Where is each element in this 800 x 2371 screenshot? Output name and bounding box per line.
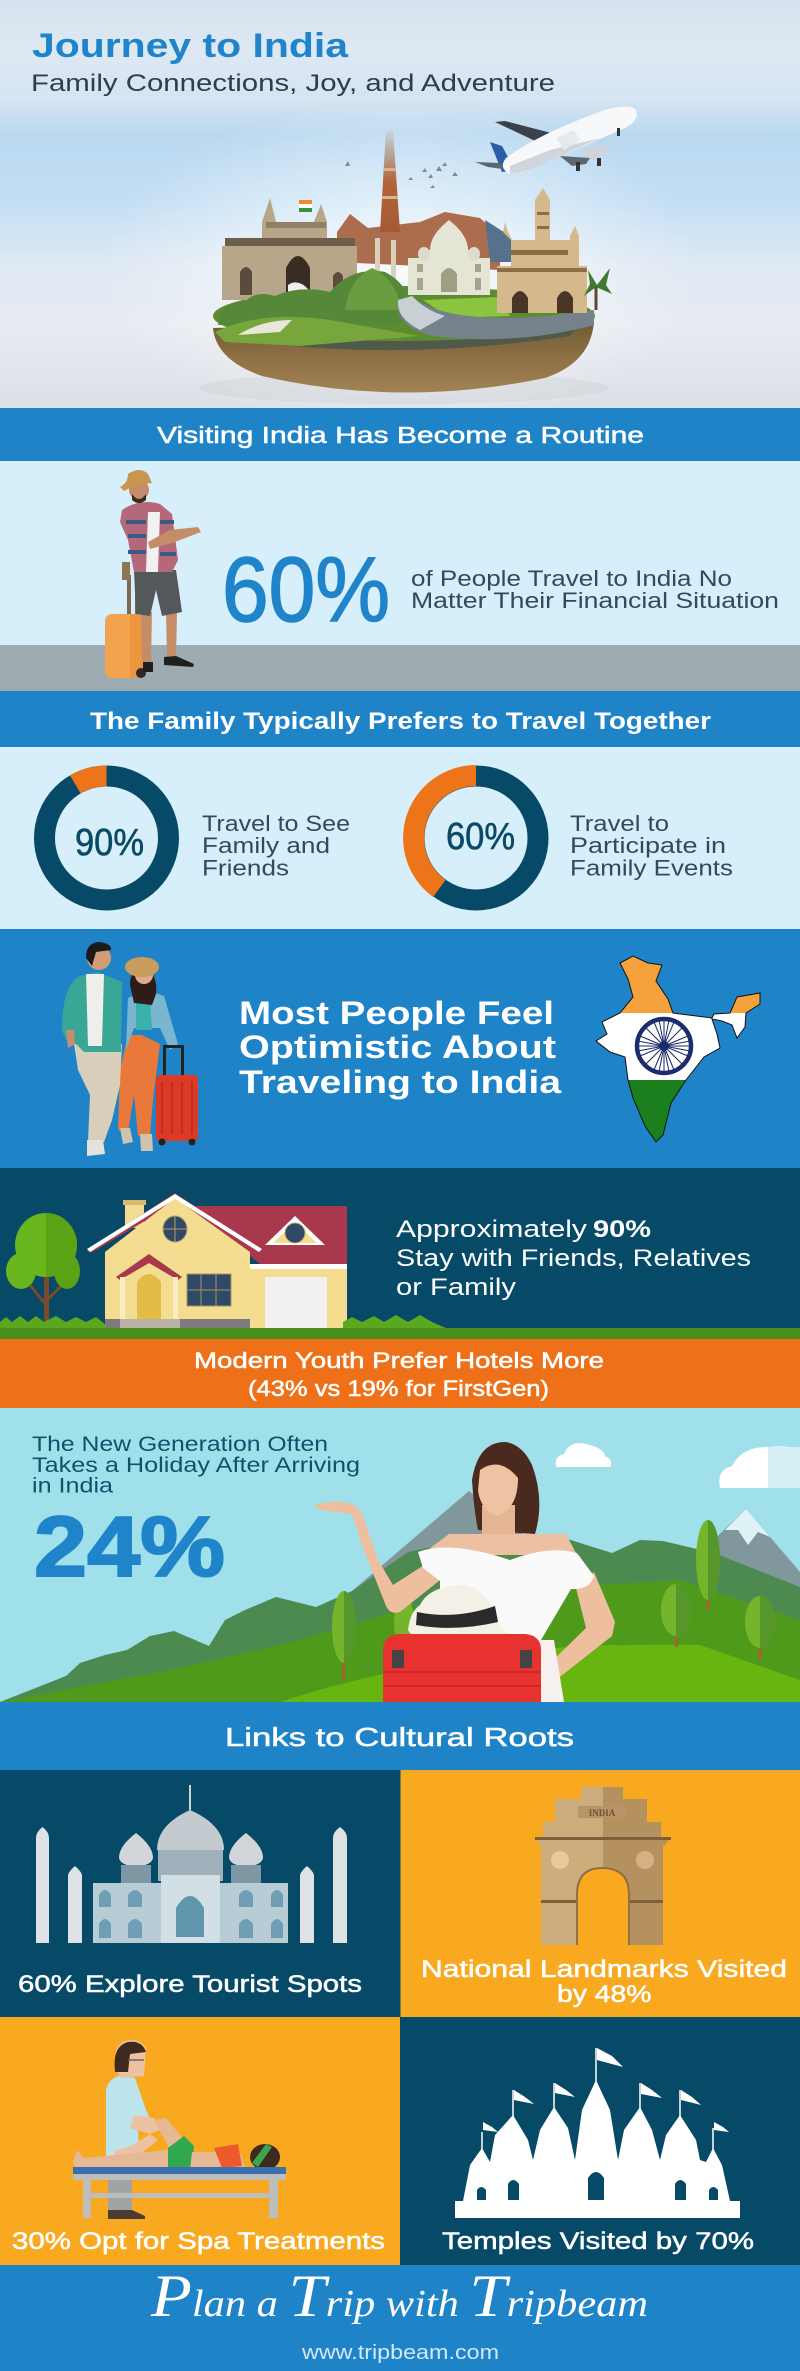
panel: national landmarks — [400, 1770, 800, 2017]
text: financial situation: Matter Their Financial Situation — [411, 588, 779, 613]
fort — [337, 212, 500, 270]
text: see family — [202, 811, 350, 880]
text: financial situation — [411, 566, 779, 613]
subtitle: Family Connections, Joy, and Adventure — [31, 70, 555, 97]
palm — [594, 285, 598, 310]
illustration: woman with suitcase — [314, 1442, 615, 1702]
gateway of india — [222, 198, 357, 300]
text: approximately 90%: or Family — [396, 1274, 516, 1301]
charminar — [497, 188, 587, 313]
heading: optimistic — [239, 995, 561, 1100]
panel: family donuts — [0, 747, 800, 929]
icon: traveler with suitcase — [105, 470, 201, 678]
banner: modern youth hotels: (43% vs 19% for FirstGen) — [248, 1376, 549, 1401]
panel: new generation holiday — [0, 1408, 800, 1702]
section heading: family together — [0, 691, 800, 747]
text: approximately 90%: 90% — [593, 1216, 651, 1243]
donut chart: 90%: 90% — [75, 822, 144, 864]
icon: india map flag — [595, 956, 760, 1143]
icon: couple with suitcase — [62, 942, 198, 1156]
icon: temple silhouette — [455, 2048, 740, 2218]
website: www.tripbeam.com — [301, 2342, 499, 2364]
text: new generation: The New Generation Often — [32, 1433, 328, 1456]
label: spa treatments: 30% Opt for Spa Treatments — [12, 2228, 385, 2255]
icon: taj mahal — [36, 1785, 347, 1943]
text: see family: Travel to See — [202, 811, 350, 836]
panel: spa treatments — [0, 2017, 400, 2265]
text: new generation — [32, 1433, 360, 1498]
icon: trees — [332, 1520, 775, 1680]
illustration: island with monuments — [199, 130, 612, 404]
section heading: routine — [0, 408, 800, 461]
landscape: mountains and hills — [0, 1491, 800, 1702]
illustration: birds — [345, 161, 458, 188]
text: family events: Family Events — [570, 856, 733, 880]
heading: optimistic: Most People Feel — [239, 995, 554, 1031]
title: Journey to India — [32, 27, 349, 65]
label: national landmarks — [421, 1956, 787, 2008]
icon: house — [87, 1193, 347, 1328]
section heading: family together: The Family Typically Prefers to Travel Together — [90, 708, 711, 735]
stat: 60%: 60% — [222, 539, 390, 641]
text: family events: Travel to — [570, 811, 669, 836]
stat: 24%: 24% — [34, 1500, 225, 1595]
icon: hedges — [0, 1315, 446, 1328]
heading: optimistic: Optimistic About — [239, 1029, 556, 1065]
section heading: cultural roots: Links to Cultural Roots — [225, 1722, 574, 1752]
road — [398, 296, 594, 339]
label: national landmarks: by 48% — [557, 1981, 652, 2008]
icon: massage therapist and patient — [73, 2040, 286, 2219]
icon: tree — [6, 1213, 80, 1323]
panel: optimistic — [0, 929, 800, 1168]
footer — [0, 2263, 800, 2371]
taj mahal — [408, 220, 490, 295]
text: see family: Friends — [202, 856, 289, 880]
decorative ground — [0, 1328, 800, 1339]
label: temples: Temples Visited by 70% — [442, 2228, 754, 2255]
section heading: routine: Visiting India Has Become a Routine — [157, 422, 644, 448]
banner: modern youth hotels: Modern Youth Prefer Hotels More — [194, 1348, 604, 1373]
panel: 60 percent travel — [0, 461, 800, 691]
call to action: Plan a Trip with Tripbeam — [150, 2263, 648, 2329]
text: financial situation: of People Travel to India No — [411, 566, 732, 591]
text: new generation: in India — [32, 1474, 113, 1498]
text: approximately 90%: Stay with Friends, Relatives — [396, 1245, 751, 1272]
panel: stay with family — [0, 1168, 800, 1328]
label: tourist spots: 60% Explore Tourist Spots — [18, 1971, 362, 1998]
banner: modern youth hotels — [0, 1339, 800, 1408]
text: family events — [570, 811, 733, 880]
text: approximately 90% — [396, 1216, 751, 1301]
icon: india gate — [535, 1787, 671, 1945]
panel: temples — [400, 2017, 800, 2265]
text: see family: Family and — [202, 833, 330, 858]
section heading: cultural roots — [0, 1702, 800, 1770]
qutb minar — [380, 130, 400, 232]
label: national landmarks: National Landmarks Visited — [421, 1956, 787, 1983]
donut chart: 60% — [403, 765, 538, 900]
icon: clouds — [556, 1443, 800, 1488]
icon: india gate: INDIA — [589, 1808, 616, 1818]
donut chart: 60%: 60% — [446, 816, 515, 858]
text: new generation: Takes a Holiday After Arriving — [32, 1454, 360, 1477]
bushes — [218, 271, 412, 325]
illustration: airplane — [475, 106, 637, 174]
hero panel — [0, 0, 800, 440]
donut chart: 90% — [44, 766, 168, 900]
panel: tourist spots — [0, 1770, 400, 2017]
text: approximately 90%: Approximately — [396, 1216, 587, 1243]
text: family events: Participate in — [570, 833, 726, 858]
heading: optimistic: Traveling to India — [239, 1064, 561, 1100]
